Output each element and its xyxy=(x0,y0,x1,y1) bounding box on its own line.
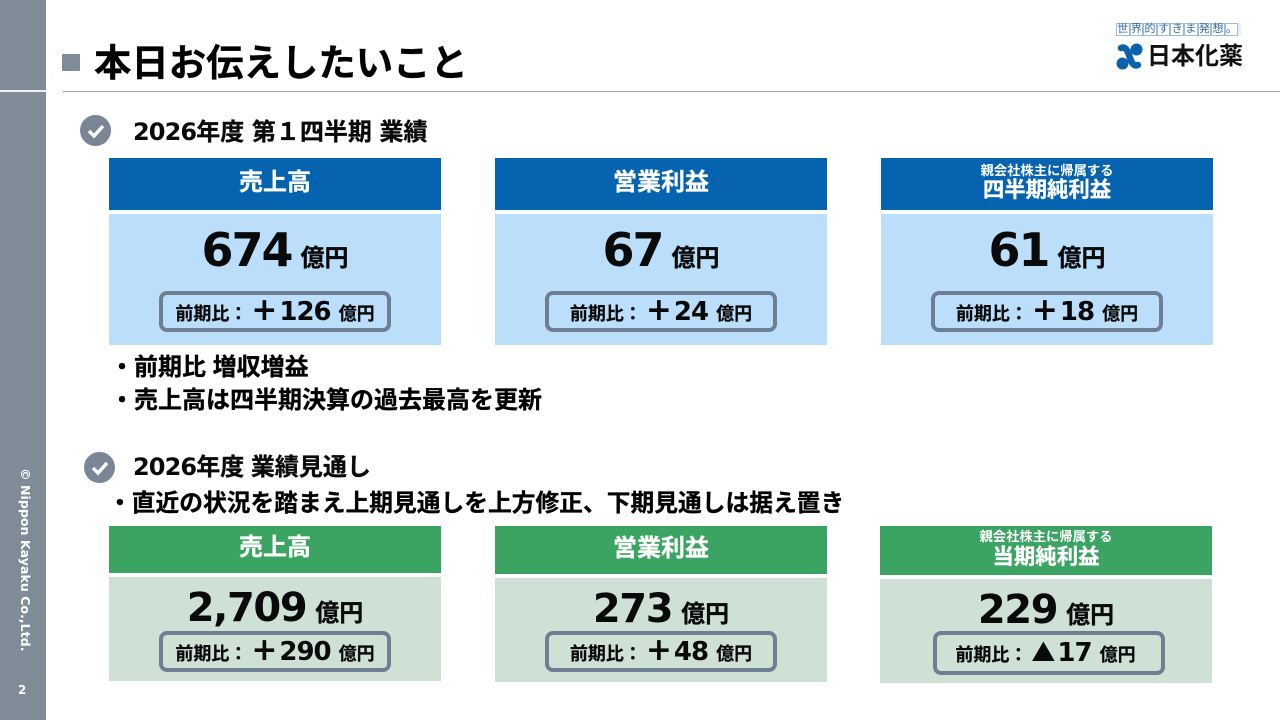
logo tagline: す xyxy=(1158,23,1169,35)
copyright: © Nippon Kayaku Co.,Ltd. xyxy=(18,468,33,651)
logo mark xyxy=(1116,44,1142,70)
header: 四半期純利益 xyxy=(983,173,1111,204)
sidebar xyxy=(0,0,46,720)
bullet 2: ・売上高は四半期決算の過去最高を更新 xyxy=(110,387,542,414)
header: 売上高 xyxy=(239,527,311,562)
logo tagline: 的 xyxy=(1144,23,1155,35)
logo name: 日本化薬 xyxy=(1147,43,1243,70)
panel: forecast operating profit xyxy=(495,526,827,682)
value: 273 億円 xyxy=(593,586,729,632)
header xyxy=(881,158,1213,210)
value: 229 億円 xyxy=(978,587,1114,633)
comparison pill: 前期比：＋18 億円 xyxy=(956,291,1138,328)
value: 2,709 億円 xyxy=(187,585,363,631)
section heading: results: 2026年度 第１四半期 業績 xyxy=(133,118,428,146)
logo tagline: き xyxy=(1172,23,1183,35)
header xyxy=(880,526,1212,575)
comparison pill xyxy=(933,631,1165,675)
section heading: forecast: 2026年度 業績見通し xyxy=(133,453,371,481)
forecast bullet: ・直近の状況を踏まえ上期見通しを上方修正、下期見通しは据え置き xyxy=(108,490,844,517)
panel: Q1 sales xyxy=(109,158,441,345)
check icon: results xyxy=(80,115,111,146)
panel: Q1 net profit xyxy=(881,158,1213,345)
comparison pill: 前期比：＋126 億円 xyxy=(175,291,375,328)
header xyxy=(109,158,441,210)
logo tagline: 。 xyxy=(1226,23,1237,35)
panel: forecast net profit xyxy=(880,526,1212,683)
logo tagline: 発 xyxy=(1199,23,1210,35)
panel: Q1 operating profit xyxy=(495,158,827,345)
header xyxy=(495,526,827,574)
logo tagline: 界 xyxy=(1131,23,1142,35)
body xyxy=(881,214,1213,345)
header: 親会社株主に帰属する xyxy=(981,160,1113,179)
body xyxy=(880,579,1212,683)
logo tagline: 世 xyxy=(1117,23,1128,35)
body xyxy=(495,578,827,682)
logo tagline: 想 xyxy=(1212,23,1223,35)
title rule xyxy=(63,91,1280,92)
body xyxy=(495,214,827,345)
sidebar divider xyxy=(0,90,46,92)
header xyxy=(495,158,827,210)
body xyxy=(109,214,441,345)
logo tagline xyxy=(1116,23,1241,36)
logo tagline: ま xyxy=(1185,23,1196,35)
comparison pill: 前期比：＋290 億円 xyxy=(175,631,375,668)
value: 674 億円 xyxy=(201,223,349,277)
header: 売上高 xyxy=(239,162,311,197)
comparison pill: 前期比：＋24 億円 xyxy=(570,291,752,328)
title: 本日お伝えしたいこと xyxy=(94,42,468,84)
value: 67 億円 xyxy=(602,223,720,277)
logo xyxy=(1116,22,1243,70)
panel: forecast sales xyxy=(109,526,441,681)
bullet 1: ・前期比 増収増益 xyxy=(110,354,309,381)
title marker xyxy=(62,54,80,71)
value: 61 億円 xyxy=(988,223,1106,277)
comparison pill: 前期比：▲17 億円 xyxy=(955,633,1136,668)
header: 営業利益 xyxy=(613,528,709,563)
body xyxy=(109,577,441,681)
comparison pill: 前期比：＋48 億円 xyxy=(570,631,752,668)
header: 当期純利益 xyxy=(993,540,1099,571)
header xyxy=(109,526,441,573)
header: 営業利益 xyxy=(613,162,709,197)
results bullets xyxy=(110,354,542,414)
page number: 2 xyxy=(18,683,26,697)
header: 親会社株主に帰属する xyxy=(980,526,1112,545)
check icon: forecast xyxy=(84,452,115,483)
